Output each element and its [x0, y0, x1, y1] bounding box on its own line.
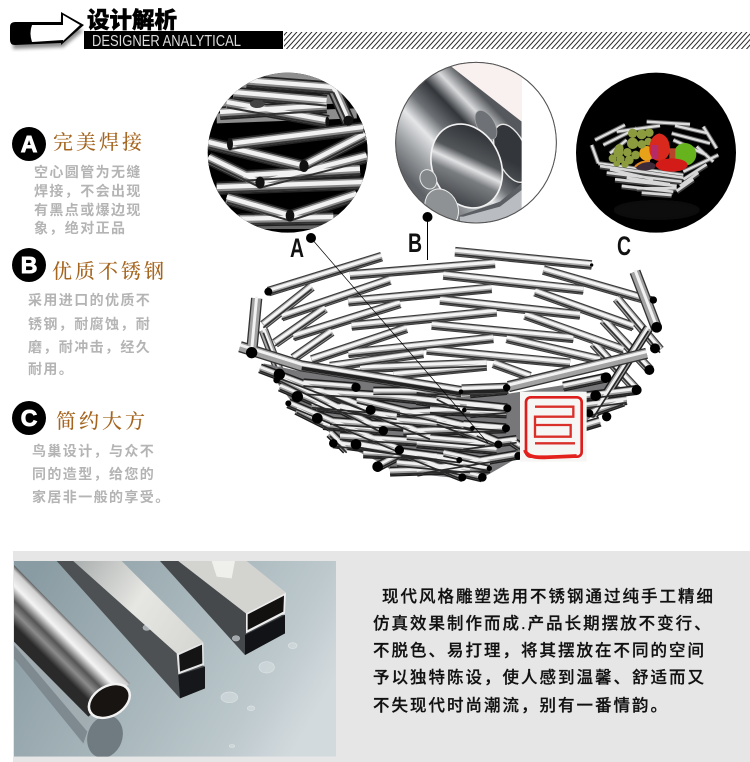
body A: 空心圆管为无缝: [34, 164, 142, 180]
body A: 焊接，不会出现: [34, 183, 142, 199]
lower tube stack: [260, 327, 648, 480]
labels A B C: A: [290, 233, 304, 263]
body B: 耐用。: [28, 361, 74, 377]
body A: [34, 164, 142, 236]
red seal stamp: [520, 392, 587, 462]
badge B: B: [21, 252, 37, 278]
photo: stainless steel tubes: [14, 561, 336, 762]
body B: 锈钢，耐腐蚀，耐: [28, 316, 151, 332]
panel: feature B: [12, 248, 167, 377]
header: hatched strip: [284, 32, 750, 49]
badge C: C: [21, 405, 37, 431]
body B: 磨，耐冲击，经久: [28, 339, 151, 355]
description text: 现代风格雕塑选用不锈钢通过纯手工精细: [382, 587, 715, 606]
body B: [28, 292, 151, 377]
labels A B C: B: [408, 228, 422, 258]
tube open ends: [246, 263, 662, 482]
body A: 有黑点或爆边现: [34, 202, 142, 218]
badge C: [12, 401, 46, 435]
badge A: A: [21, 131, 37, 157]
front rim tubes: [240, 270, 657, 394]
heading B: 优质不锈钢: [52, 260, 167, 283]
body C: 鸟巢设计，与众不: [32, 443, 155, 459]
main basket photo: [240, 250, 662, 482]
labels A B C: C: [617, 231, 631, 261]
description text: 不失现代时尚潮流，别有一番情韵。: [373, 696, 669, 715]
heading A: 完美焊接: [53, 131, 145, 154]
heading C: 简约大方: [56, 410, 148, 433]
header: title: 设计解析: [87, 8, 177, 33]
panel: feature A: [12, 127, 145, 236]
basket lower silhouette: [263, 363, 620, 478]
header: black subtitle bar: DESIGNER ANALYTICAL: [92, 33, 241, 50]
detail circle C: basket with fruit: [576, 73, 736, 233]
callout A: leader line and dot: [306, 233, 488, 443]
badge B: [12, 248, 46, 282]
description text: [373, 587, 715, 715]
panel: material description: [13, 551, 750, 762]
body C: 同的造型，给您的: [32, 466, 155, 482]
detail circle A: welded tubes: [207, 70, 370, 233]
description text: 予以独特陈设，使人感到温馨、舒适而又: [373, 668, 706, 687]
callout B: leader line and dot: [422, 212, 432, 260]
panel: feature C: [12, 401, 171, 505]
description text: 仿真效果制作而成.产品长期摆放不变行、: [373, 613, 713, 633]
labels A B C: [290, 228, 631, 263]
body B: 采用进口的优质不: [28, 292, 151, 308]
body C: 家居非一般的享受。: [32, 489, 171, 505]
fruit: [609, 128, 696, 172]
detail circle B: tube cross-section: [395, 62, 562, 233]
description text: 不脱色、易打理，将其摆放在不同的空间: [373, 641, 706, 660]
back tubes: [263, 250, 660, 393]
header: arrow icon: [10, 12, 84, 49]
body A: 象，绝对正品: [34, 220, 126, 236]
body C: [32, 443, 171, 505]
